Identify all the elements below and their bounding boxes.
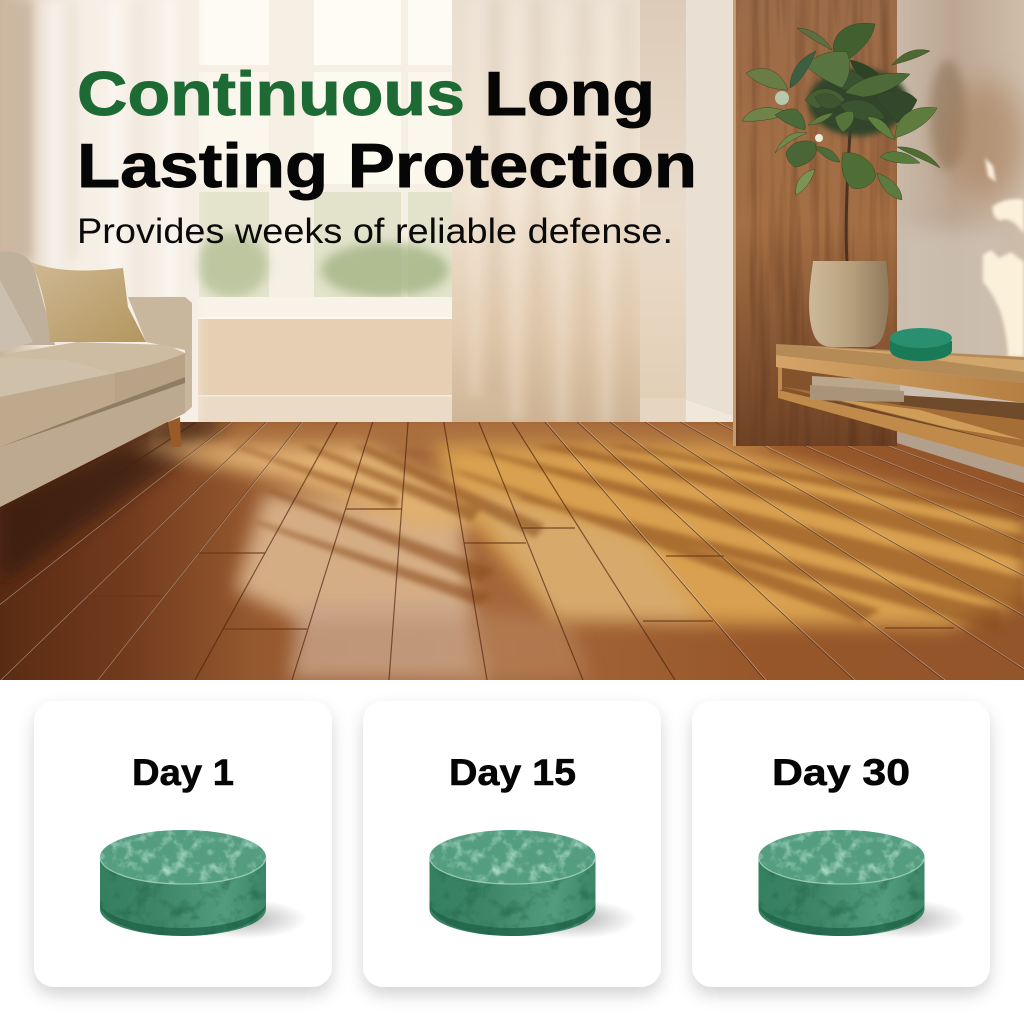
title [77,60,697,201]
sofa under-seat fill [0,370,185,507]
window [196,0,453,320]
sofa floor shadow [0,410,230,585]
tablet: day 1 [100,830,307,939]
sofa arm [128,297,192,413]
floor [0,422,1024,680]
right wall with leaf shadows [897,0,1024,420]
heading: day 1: Day 1 [132,752,234,793]
bottom band [0,680,1024,1024]
panel: day 30 card [692,701,990,987]
sofa leg [168,417,181,447]
pot [809,261,889,347]
seat right [0,342,185,403]
plank lines [0,422,1024,680]
heading: day 15: Day 15 [449,752,576,793]
wall under window [198,319,453,396]
buds [815,134,823,142]
diagonal shadow bands [232,445,1024,632]
right curtains [452,0,640,424]
pillow tan [31,262,146,342]
panel: day 15 card [363,701,661,987]
side wall [640,0,733,446]
upper shelf [776,344,1024,403]
title: Continuous Long [77,60,655,129]
lower shelf [778,350,1024,467]
heading: day 30: Day 30 [772,752,910,793]
title: Lasting Protection [77,132,697,201]
plant trunk [846,120,857,262]
back wall and curtain light [0,0,733,425]
wood wall panel [733,0,897,446]
left curtains [0,0,200,420]
tablet: day 15 [430,830,636,939]
panel: day 1 card [34,701,332,987]
sunlight patches [235,493,470,620]
small green tablet on shelf [890,328,952,361]
plant [742,23,940,262]
sofa back [0,252,55,345]
wall under shelves [897,395,1024,447]
pillow grey [0,280,33,352]
panel: room scene [0,0,1024,680]
books [810,376,904,402]
sofa base [0,383,185,507]
tablet: day 30 [758,830,966,939]
subtitle: Provides weeks of reliable defense. [77,212,673,251]
foliage [742,23,940,200]
sofa [0,252,192,507]
seat left [0,357,115,447]
